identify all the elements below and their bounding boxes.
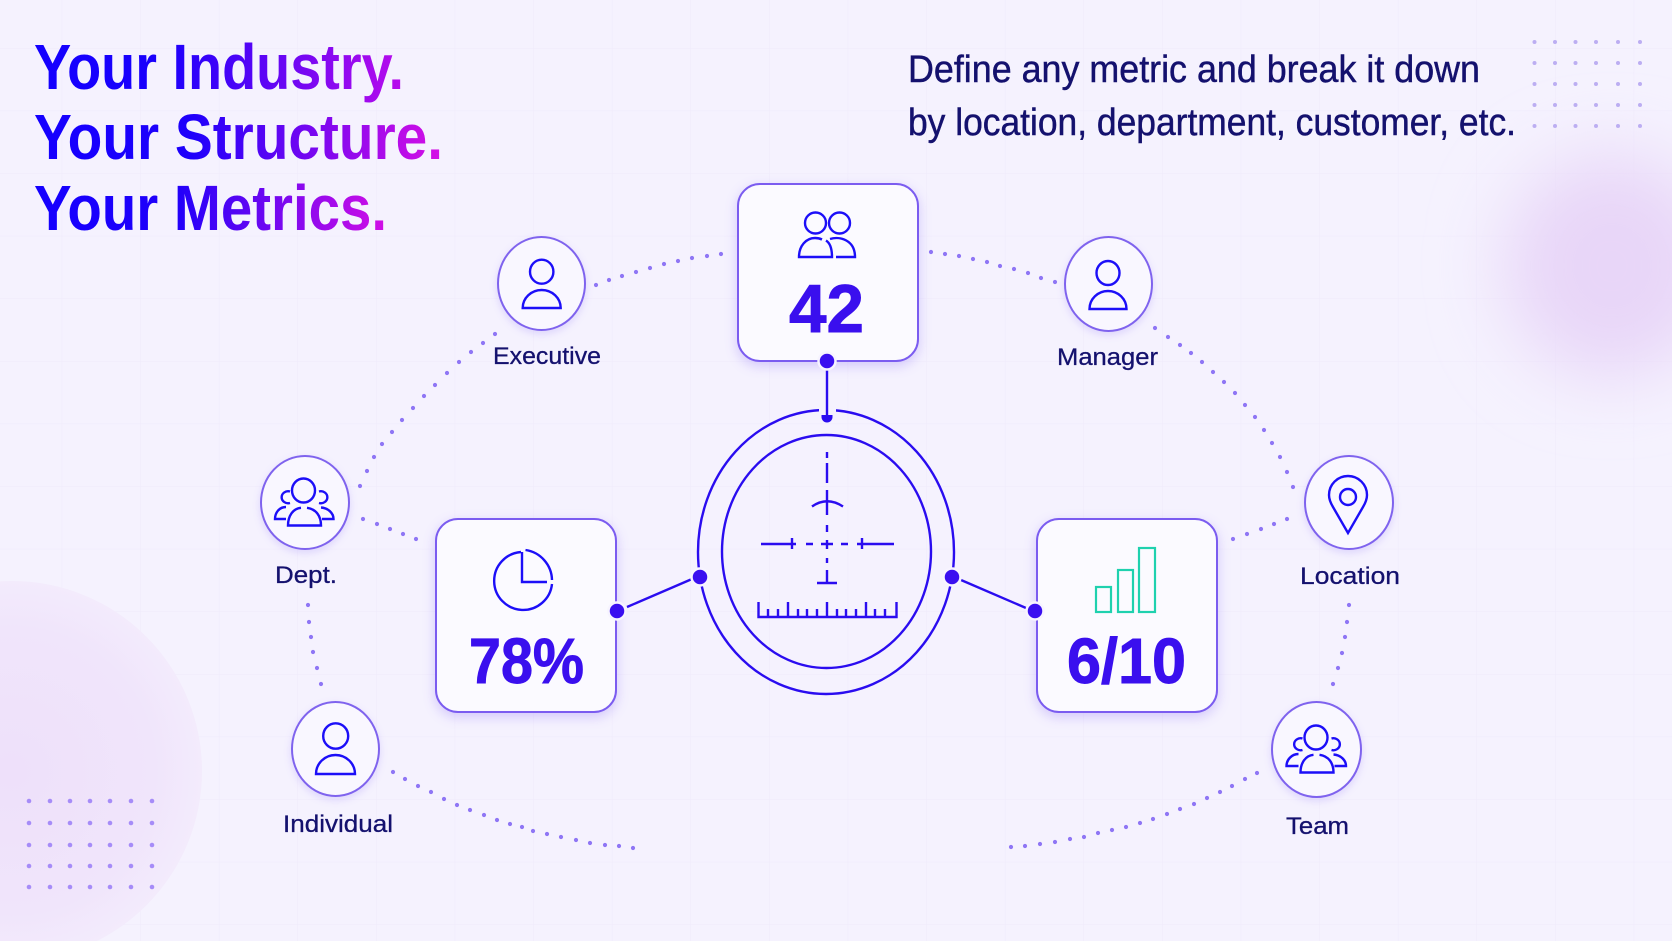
subtitle bbox=[908, 49, 1516, 144]
node: team bbox=[1272, 702, 1361, 840]
dotted connector: dept to executive bbox=[358, 332, 497, 488]
icon: pie chart bbox=[494, 550, 552, 610]
icon: bar chart bbox=[1096, 548, 1155, 612]
card: 6/10 bbox=[1037, 519, 1217, 712]
title: Your Industry. bbox=[34, 31, 404, 103]
connector: left card to gauge bbox=[608, 568, 708, 620]
dotted connector: location to team bbox=[1331, 603, 1351, 686]
dotted connector: executive to top card bbox=[594, 252, 723, 287]
dotted connector: individual to bottom bbox=[391, 770, 635, 850]
card: 78% bbox=[436, 519, 616, 712]
dotted connector: location to right card bbox=[1231, 517, 1289, 541]
value: 78%: 78% bbox=[469, 625, 584, 697]
icon: person bbox=[523, 260, 561, 308]
ruler scale bbox=[758, 602, 896, 617]
decorative blob: bottom left bbox=[0, 581, 202, 941]
central gauge: concentric rings and reticle bbox=[698, 405, 954, 694]
dotted connector: individual to dept bbox=[306, 603, 323, 686]
title: Your Structure. bbox=[34, 101, 443, 173]
label: Manager: Manager bbox=[1057, 344, 1158, 371]
dotted connector: manager to location bbox=[1153, 326, 1295, 489]
connector: top card to gauge bbox=[818, 352, 836, 422]
dotted connector: top card to manager bbox=[929, 250, 1057, 284]
dotted connector: team to bottom bbox=[1009, 771, 1259, 849]
subtitle: Define any metric and break it down bbox=[908, 49, 1480, 91]
node: manager bbox=[1057, 237, 1158, 371]
title bbox=[34, 31, 443, 244]
node: executive bbox=[493, 237, 601, 370]
icon: two people bbox=[799, 212, 855, 257]
dot grid: bottom left bbox=[27, 799, 154, 889]
value: 6/10: 6/10 bbox=[1067, 625, 1186, 697]
reticle crosshair bbox=[761, 452, 894, 583]
connector: right card to gauge bbox=[944, 568, 1044, 620]
label: Team: Team bbox=[1286, 813, 1349, 840]
node: location bbox=[1300, 456, 1400, 590]
node: dept bbox=[261, 456, 349, 589]
title: Your Metrics. bbox=[34, 172, 387, 244]
label: Executive: Executive bbox=[493, 343, 601, 370]
icon: group bbox=[1286, 726, 1346, 772]
value: 42: 42 bbox=[789, 271, 864, 347]
icon: person bbox=[316, 723, 355, 774]
icon: map pin bbox=[1329, 476, 1367, 533]
label: Location: Location bbox=[1300, 563, 1400, 590]
label: Individual: Individual bbox=[283, 811, 393, 838]
subtitle: by location, department, customer, etc. bbox=[908, 102, 1516, 144]
dot grid: top right bbox=[1532, 40, 1642, 128]
icon: person bbox=[1090, 261, 1126, 309]
node: individual bbox=[283, 702, 393, 838]
icon: group bbox=[275, 478, 334, 526]
card: 42 bbox=[738, 184, 918, 361]
dotted connector: dept to left card bbox=[361, 517, 418, 541]
decorative blob: right bbox=[1504, 154, 1672, 378]
label: Dept.: Dept. bbox=[275, 562, 337, 589]
